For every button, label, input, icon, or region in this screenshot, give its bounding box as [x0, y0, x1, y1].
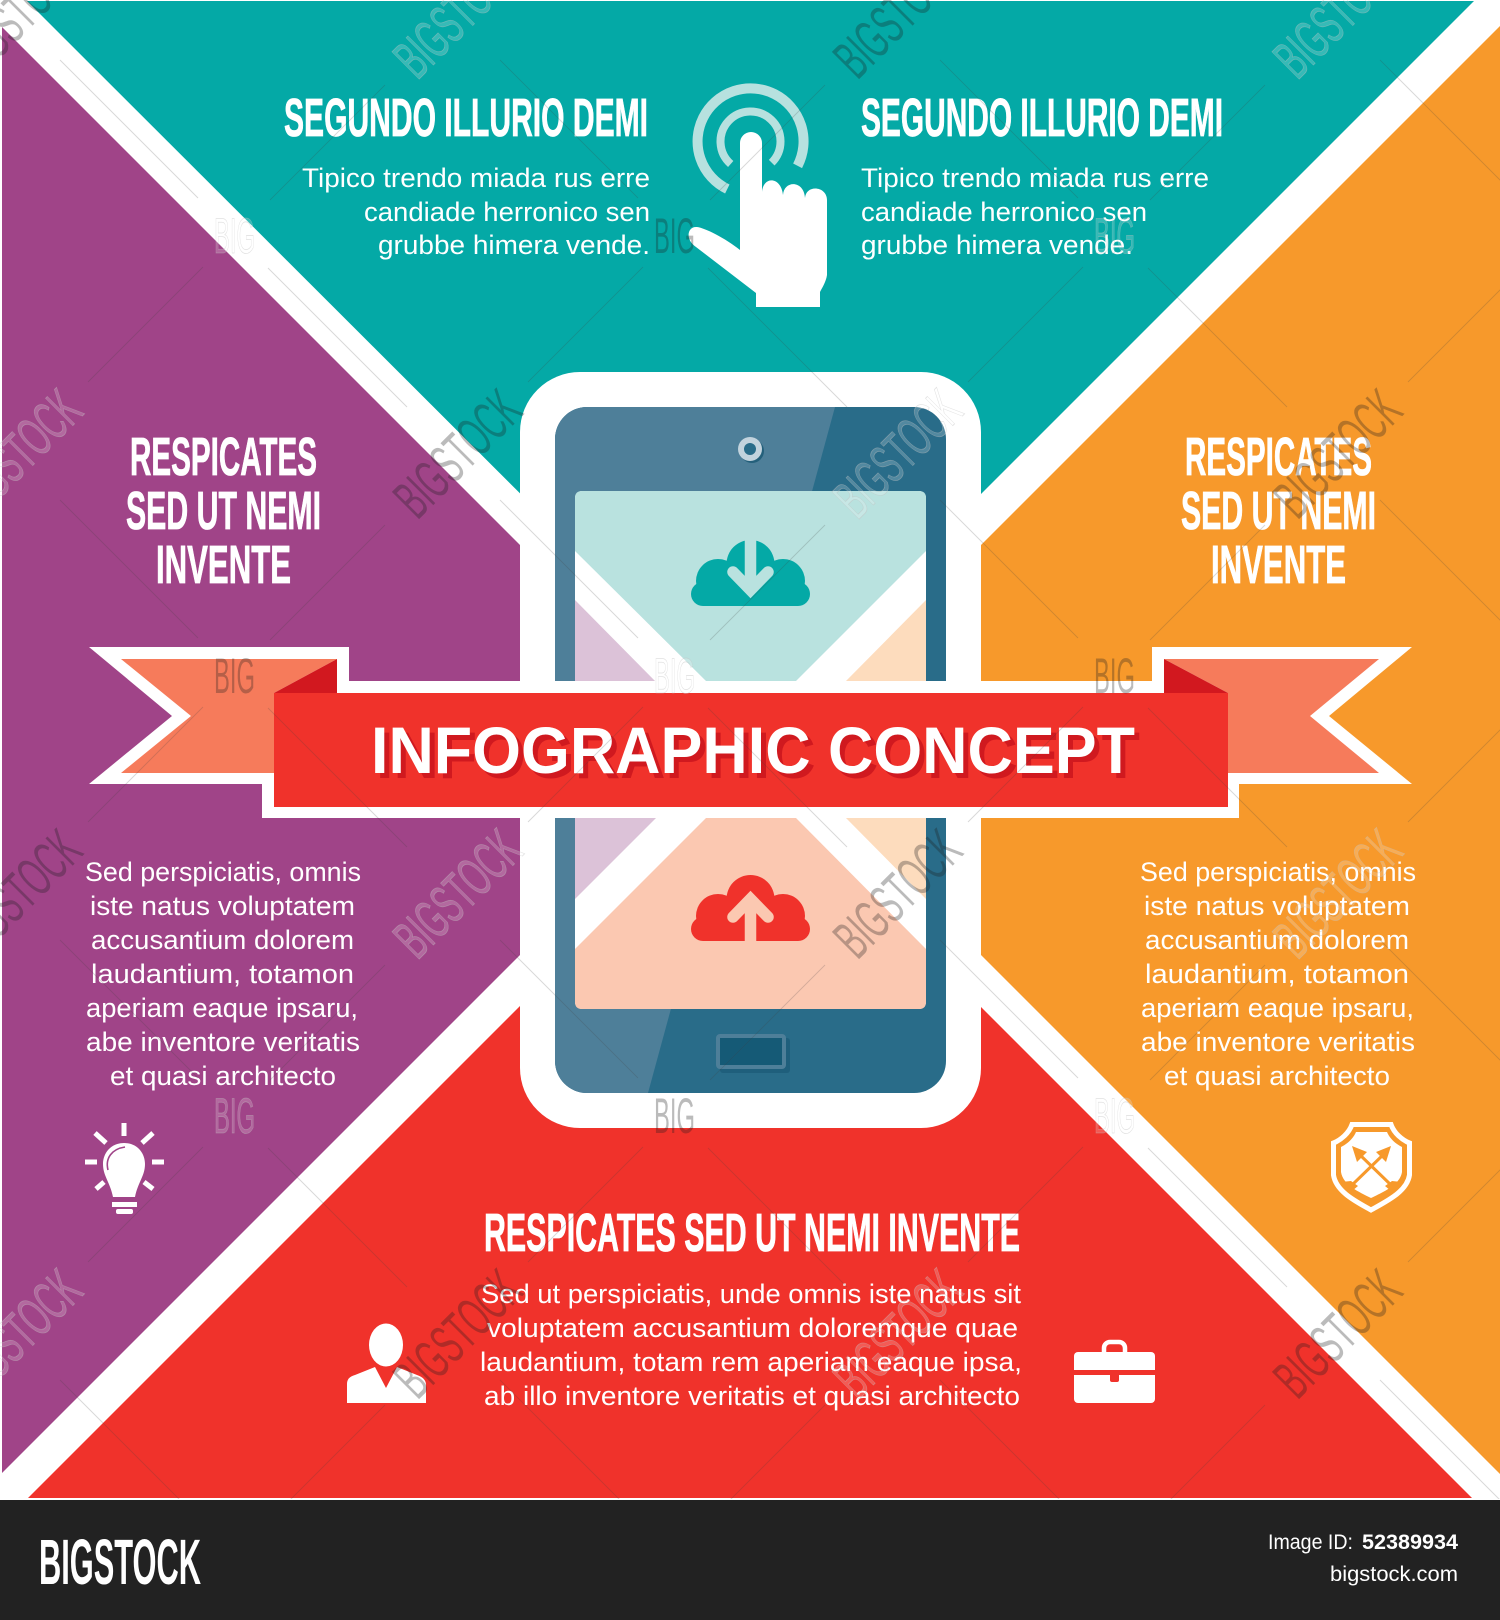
icon: light bulb	[85, 1123, 164, 1214]
ribbon left fold	[274, 659, 337, 693]
left panel heading: INVENTE	[156, 535, 291, 595]
left panel heading: SED UT NEMI	[126, 481, 321, 541]
watermark: BIG repeat: BIG	[654, 648, 695, 704]
watermark: BIGSTOCK diagonal repeat: BIGSTOCK	[381, 1257, 533, 1409]
panel: teal top triangle	[27, 1, 1474, 724]
bottom panel body text: laudantium, totam rem aperiam eaque ipsa,	[480, 1347, 1022, 1377]
body: top right	[861, 163, 1209, 260]
top left text block	[284, 88, 650, 260]
right panel body text: laudantium, totamon	[1145, 959, 1409, 989]
right panel body text: Sed perspiciatis, omnis	[1140, 857, 1416, 887]
left panel heading	[126, 427, 321, 595]
phone white outline	[520, 372, 981, 1128]
bottom panel body text: Sed ut perspiciatis, unde omnis iste natus sit	[481, 1279, 1022, 1309]
right panel heading: INVENTE	[1211, 535, 1346, 595]
ribbon white outline	[89, 647, 1412, 818]
watermark: BIG repeat: BIG	[654, 1088, 695, 1144]
phone screen	[575, 491, 926, 1009]
right panel body text: abe inventore veritatis	[1141, 1027, 1415, 1057]
left panel body text: abe inventore veritatis	[86, 1027, 360, 1057]
right panel body text: et quasi architecto	[1164, 1061, 1390, 1091]
right panel heading	[1181, 427, 1376, 595]
bottom panel body text	[480, 1279, 1022, 1411]
ribbon left tail	[121, 659, 337, 773]
icon: briefcase	[1074, 1342, 1155, 1403]
footer url: bigstock.com	[1330, 1563, 1458, 1586]
icon: shield with crossed arrows	[1334, 1124, 1410, 1210]
watermark: BIGSTOCK diagonal repeat: BIGSTOCK	[821, 817, 973, 969]
icon: business person	[347, 1324, 426, 1403]
right panel body text: aperiam eaque ipsaru,	[1141, 993, 1414, 1023]
bottom panel body text: voluptatem accusantium doloremque quae	[487, 1313, 1018, 1343]
ribbon banner	[89, 647, 1412, 818]
text: BIG	[1094, 208, 1135, 264]
watermark: BIG repeat: BIG	[214, 208, 255, 264]
body: top left: candiade herronico sen	[364, 197, 650, 227]
top right text block	[861, 88, 1223, 260]
right panel body text: accusantium dolorem	[1145, 925, 1409, 955]
left panel heading: RESPICATES	[130, 427, 317, 487]
footer image id label: Image ID:	[1268, 1531, 1353, 1554]
heading: top left: SEGUNDO ILLURIO DEMI	[284, 88, 648, 148]
left panel body text: laudantium, totamon	[91, 959, 354, 989]
panel: purple left triangle	[2, 27, 725, 1473]
watermark: BIGSTOCK diagonal repeat: BIGSTOCK	[381, 377, 533, 529]
icon: cloud upload	[691, 875, 810, 943]
ribbon centre	[274, 693, 1228, 807]
left panel body text	[85, 857, 361, 1091]
watermark: BIGSTOCK diagonal repeat: BIGSTOCK	[381, 817, 533, 969]
panel: red bottom triangle	[28, 776, 1472, 1498]
bottom panel heading: RESPICATES SED UT NEMI INVENTE	[484, 1203, 1020, 1263]
ribbon right fold	[1164, 659, 1228, 693]
footer bar: BIGSTOCK	[39, 1526, 201, 1598]
body: top left	[302, 163, 650, 260]
bottom panel body text: ab illo inventore veritatis et quasi architecto	[484, 1381, 1020, 1411]
watermark: BIGSTOCK diagonal repeat: BIGSTOCK	[821, 377, 973, 529]
ribbon right tail	[1164, 659, 1379, 773]
panel: orange right triangle	[776, 26, 1500, 1474]
icon: tapping hand with rings	[689, 88, 827, 307]
phone home button	[718, 1036, 790, 1073]
watermark: BIG repeat: BIG	[654, 208, 695, 264]
left panel body text: Sed perspiciatis, omnis	[85, 857, 361, 887]
watermark: BIG repeat	[214, 208, 1135, 1144]
watermark: BIG repeat: BIG	[214, 648, 255, 704]
left panel body text: aperiam eaque ipsaru,	[86, 993, 358, 1023]
icon: cloud download	[691, 538, 810, 606]
body: top left: grubbe himera vende.	[378, 230, 650, 260]
body: top right: Tipico trendo miada rus erre	[861, 163, 1209, 193]
footer image id number: 52389934	[1362, 1531, 1458, 1554]
phone body	[555, 407, 946, 1093]
left panel body text: et quasi architecto	[110, 1061, 336, 1091]
phone camera	[738, 437, 764, 463]
left panel body text: iste natus voluptatem	[90, 891, 355, 921]
phone	[520, 372, 981, 1128]
body: top left: Tipico trendo miada rus erre	[302, 163, 650, 193]
body: top right: candiade herronico sen	[861, 197, 1147, 227]
right panel body text	[1140, 857, 1416, 1091]
body: top right: grubbe himera vende.	[861, 230, 1133, 260]
watermark: BIG repeat: BIG	[214, 1088, 255, 1144]
heading: top right: SEGUNDO ILLURIO DEMI	[861, 88, 1223, 148]
left panel body text: accusantium dolorem	[91, 925, 354, 955]
title: INFOGRAPHIC CONCEPT	[371, 713, 1135, 787]
watermark: BIGSTOCK diagonal repeat: BIGSTOCK	[821, 1257, 973, 1409]
footer bar	[0, 1500, 1500, 1620]
right panel body text: iste natus voluptatem	[1144, 891, 1410, 921]
text: BIG	[1094, 648, 1135, 704]
text: BIG	[1094, 1088, 1135, 1144]
